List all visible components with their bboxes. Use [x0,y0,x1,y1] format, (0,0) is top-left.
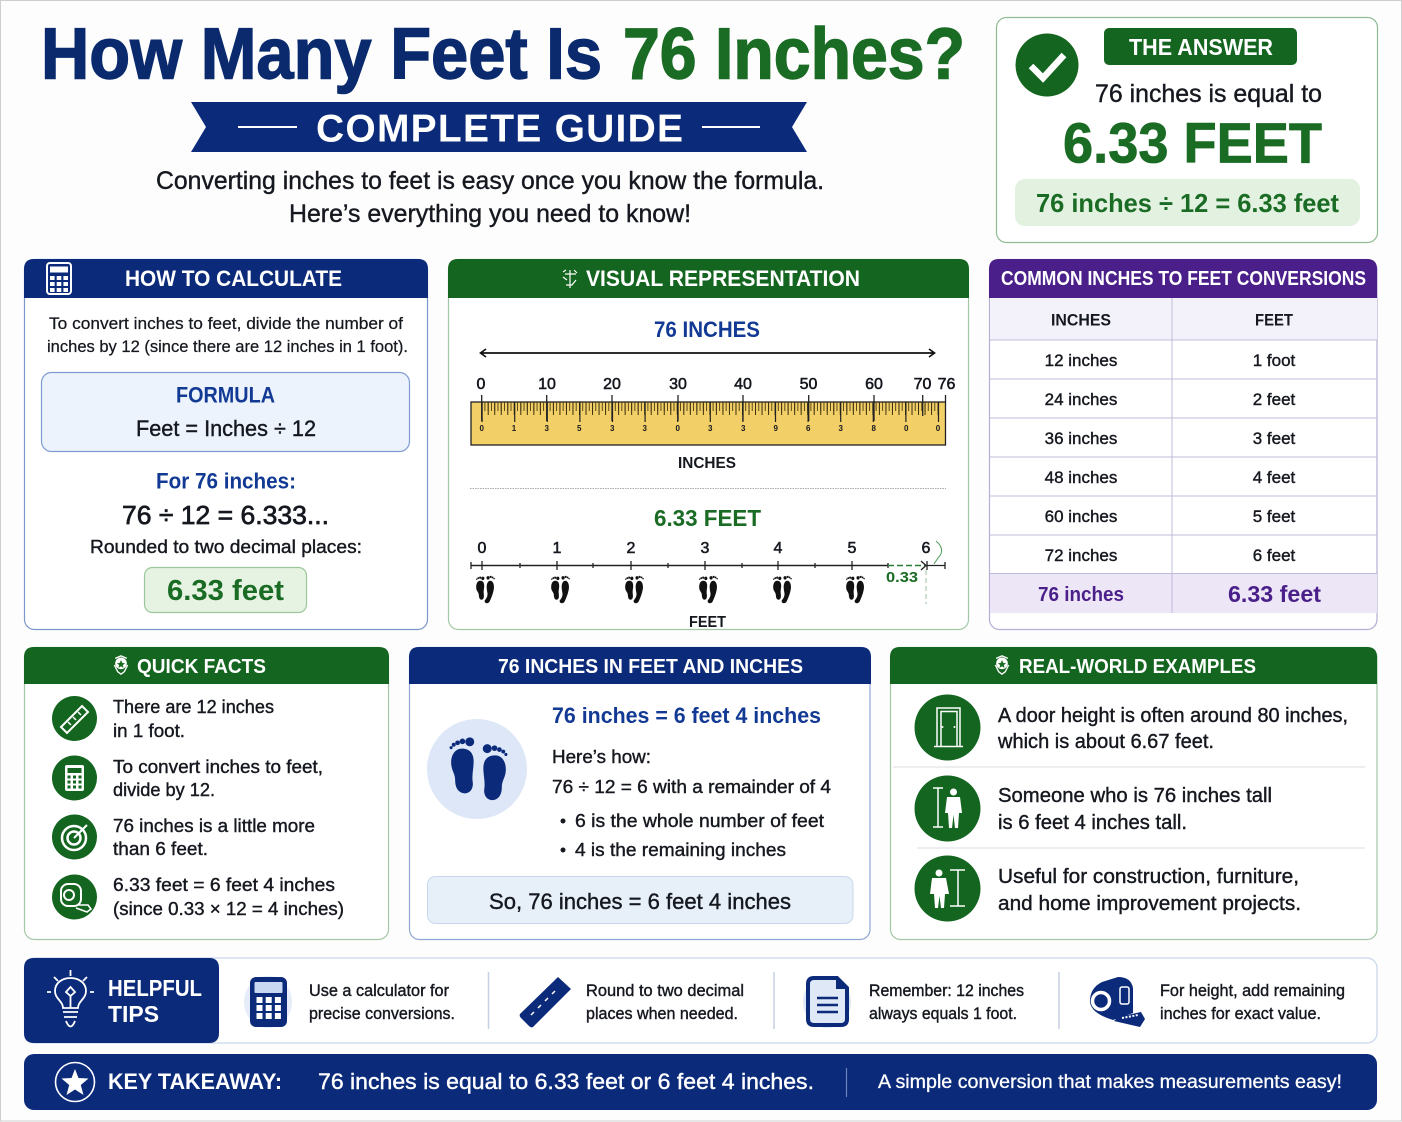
explanation [552,746,831,860]
inches label: 76 INCHES [654,317,760,342]
footprints [476,576,865,603]
ruler numbers: 0 [477,376,486,393]
ruler: 0 [480,424,484,433]
answer intro: 76 inches is equal to [1095,80,1322,108]
ruler: 5 [577,424,582,433]
tip: document: always equals 1 foot. [869,1005,1017,1023]
worked example [90,468,362,557]
heading: QUICK FACTS [137,656,266,678]
tip: calculator: precise conversions. [309,1005,455,1023]
answer equation [1015,179,1360,226]
ruler numbers: 10 [538,376,556,393]
feet numbers: 5 [848,540,857,557]
table rows: 3 feet [1253,429,1296,448]
tip: document: Remember: 12 inches [869,982,1024,1000]
example: door [914,694,1348,760]
table rows: 12 inches [1045,351,1117,370]
icon: footprints [427,719,527,819]
table rows: 4 feet [1253,468,1296,487]
tips heading: HELPFUL [108,975,202,1001]
subtitle [156,167,824,228]
table column headings: FEET [1255,312,1293,330]
feet numbers: 3 [701,540,710,557]
fact: little more than 6 feet: than 6 feet. [113,838,208,859]
panel header [448,259,969,298]
tip: ruler: places when needed. [586,1005,738,1023]
heading: VISUAL REPRESENTATION [586,266,860,291]
panel: real-world examples [890,647,1377,940]
heading: HOW TO CALCULATE [125,266,342,291]
worked example: 76 ÷ 12 = 6.333... [122,500,329,530]
fact: divide by 12: To convert inches to feet, [113,756,323,777]
takeaway text: 76 inches is equal to 6.33 feet or 6 feet 4 inches. [318,1069,814,1094]
worked example: For 76 inches: [156,468,296,494]
table rows: 5 feet [1253,507,1296,526]
tips heading [108,975,202,1027]
icon: badge [995,656,1009,674]
panel: how to calculate [24,259,428,630]
panel header [24,259,428,298]
fact: divide by 12: divide by 12. [113,779,215,800]
answer label: THE ANSWER [1129,34,1273,60]
panel: feet and inches [409,647,871,940]
subtitle: Here’s everything you need to know! [289,200,691,228]
table rows: 36 inches [1045,429,1117,448]
icon: calculator [47,263,71,294]
answer label [1104,28,1297,65]
example: construction: Useful for construction, furniture, [998,866,1299,888]
intro text: To convert inches to feet, divide the number of [49,314,403,333]
formula box: FORMULA [176,382,275,408]
summary box: So, 76 inches = 6 feet 4 inches [489,889,791,914]
tip: tape measure: For height, add remaining [1160,982,1345,1000]
ruler: 0 [904,424,909,433]
fact: little more than 6 feet: 76 inches is a little more [113,815,315,836]
tip: document [803,976,1024,1028]
formula box: Feet = Inches ÷ 12 [136,416,316,441]
arrow: span of 76 inches [480,349,934,357]
table rows: 48 inches [1045,468,1117,487]
example: tall person [914,776,1272,842]
table rows: 24 inches [1045,390,1117,409]
ruler: 3 [708,424,713,433]
table column headings [1051,312,1293,330]
table column headings: INCHES [1051,312,1111,330]
feet numbers: 2 [627,540,636,557]
fact: divide by 12 [52,756,323,800]
ruler: 1 [512,424,517,433]
explanation: Here’s how: [552,746,651,767]
remainder label: 0.33 [886,569,918,586]
ruler numbers: 40 [734,376,752,393]
ruler numbers: 50 [800,376,818,393]
subtitle: Converting inches to feet is easy once you know the formula. [156,167,824,195]
explanation: 6 is the whole number of feet [575,810,824,831]
icon: star [56,1062,94,1102]
answer equation: 76 inches ÷ 12 = 6.33 feet [1036,188,1339,218]
fact: 12 inches: in 1 foot. [113,720,185,741]
highlighted row: 76 inches [1038,584,1124,606]
icon: light bulb [47,970,94,1026]
heading: REAL-WORLD EXAMPLES [1019,656,1256,678]
table rows: 60 inches [1045,507,1117,526]
tips label block [24,958,219,1043]
ruler: 9 [774,424,778,433]
panel: visual representation [448,259,969,631]
feet caption: FEET [689,614,726,631]
example: tall person: Someone who is 76 inches tall [998,785,1272,807]
ruler [471,395,946,445]
tips heading: TIPS [108,1001,159,1027]
title: How Many Feet Is [41,14,602,94]
panel header [24,647,389,684]
ruler numbers: 30 [669,376,687,393]
ruler: 3 [741,424,746,433]
ruler: 3 [838,424,844,433]
fact: 6 feet 4 inches: 6.33 feet = 6 feet 4 inches [113,874,335,895]
highlighted row: 6.33 feet [1228,581,1321,607]
icon: header emblem [563,270,577,288]
title: 76 Inches? [623,14,965,94]
table rows: 6 feet [1253,546,1296,565]
feet numbers: 1 [553,540,562,557]
fact: 6 feet 4 inches: (since 0.33 × 12 = 4 inches) [113,898,344,919]
ruler: 0 [936,424,941,433]
panel: quick facts [24,647,389,940]
table rows: 72 inches [1045,546,1117,565]
ruler: 6 [806,424,811,433]
tip: tape measure: inches for exact value. [1160,1005,1321,1023]
summary box [428,876,853,924]
feet numbers: 6 [922,540,931,557]
takeaway note: A simple conversion that makes measurements easy! [878,1072,1342,1093]
ruler numbers: 20 [603,376,621,393]
example: tall person: is 6 feet 4 inches tall. [998,812,1187,834]
ruler numbers: 70 [914,376,932,393]
highlighted row background [990,574,1377,613]
ruler: 3 [544,424,550,433]
answer value: 6.33 FEET [1063,112,1322,176]
title [41,14,965,94]
explanation: 76 ÷ 12 = 6 with a remainder of 4 [552,776,831,797]
panel: the answer [996,18,1378,242]
tip: calculator: Use a calculator for [309,982,449,1000]
worked example: Rounded to two decimal places: [90,536,362,557]
result box [144,568,306,612]
intro text: inches by 12 (since there are 12 inches in 1 foot). [47,337,408,356]
explanation: 4 is the remaining inches [575,839,786,860]
formula box [42,372,410,452]
fact: 6 feet 4 inches [52,874,344,920]
takeaway label: KEY TAKEAWAY: [108,1069,282,1094]
icon: check mark [1016,34,1078,96]
banner: complete guide [191,102,807,152]
ruler numbers: 76 [938,376,956,393]
ruler: 3 [642,424,648,433]
example: door: A door height is often around 80 inches, [998,705,1348,727]
feet number line [471,541,945,604]
table rows: 2 feet [1253,390,1296,409]
tip: ruler [520,977,744,1027]
feet numbers: 4 [774,540,783,557]
heading: 76 INCHES IN FEET AND INCHES [498,656,803,678]
tip: ruler: Round to two decimal [586,982,744,1000]
banner: complete guide: COMPLETE GUIDE [316,108,683,150]
panel header [409,647,871,684]
table rows [1045,351,1296,565]
panel: conversion table [989,259,1377,630]
highlighted row [1038,581,1321,607]
example: construction: and home improvement projects. [998,893,1301,915]
tip: tape measure [1090,977,1345,1027]
intro text [47,314,408,356]
feet numbers: 0 [478,540,487,557]
example: construction [914,856,1301,922]
fact: 12 inches [52,696,274,741]
ruler: 0 [676,424,680,433]
ruler numbers [477,376,956,393]
table column header background [990,298,1377,340]
fact: little more than 6 feet [52,814,315,860]
ruler numbers: 60 [865,376,883,393]
table rows: 1 foot [1253,351,1296,370]
feet numbers [478,540,931,557]
result heading: 76 inches = 6 feet 4 inches [552,703,821,728]
tip: calculator [244,976,455,1028]
key takeaway bar [24,1054,1377,1110]
feet label: 6.33 FEET [654,505,761,531]
panel header [989,259,1377,298]
panel header [890,647,1377,684]
ruler: 8 [872,424,876,433]
ruler: 3 [610,424,615,433]
panel: helpful tips [24,958,1377,1043]
fact: 12 inches: There are 12 inches [113,696,274,717]
result box: 6.33 feet [167,575,284,607]
example: door: which is about 6.67 feet. [997,731,1214,753]
icon: badge [114,656,128,674]
ruler caption: INCHES [678,455,736,472]
